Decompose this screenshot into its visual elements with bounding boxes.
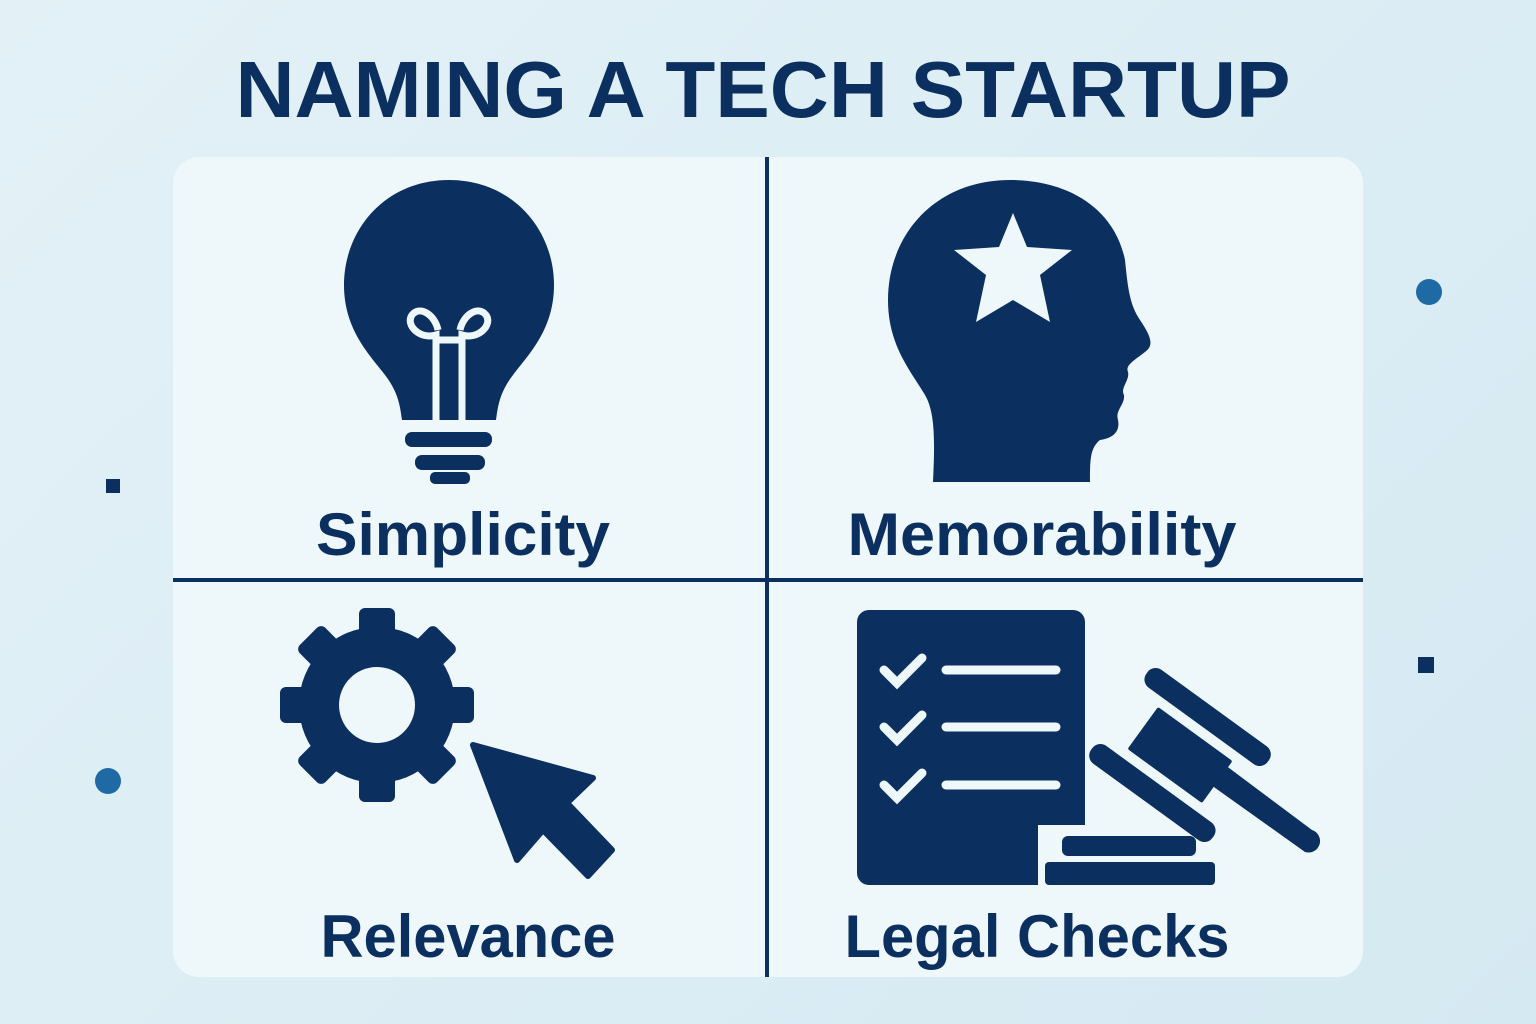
icon: head with star	[888, 180, 1150, 482]
label: Memorability: Memorability	[848, 501, 1237, 568]
title: NAMING A TECH STARTUP	[236, 45, 1290, 134]
icon: light bulb	[344, 180, 554, 484]
label: Legal Checks: Legal Checks	[844, 903, 1230, 970]
label: Relevance: Relevance	[320, 903, 616, 970]
icon: checklist with gavel	[857, 590, 1329, 895]
icon: gear with cursor	[280, 608, 612, 876]
decoration dots	[95, 279, 1442, 794]
label: Simplicity: Simplicity	[316, 501, 611, 568]
panel: grid	[173, 157, 1363, 977]
